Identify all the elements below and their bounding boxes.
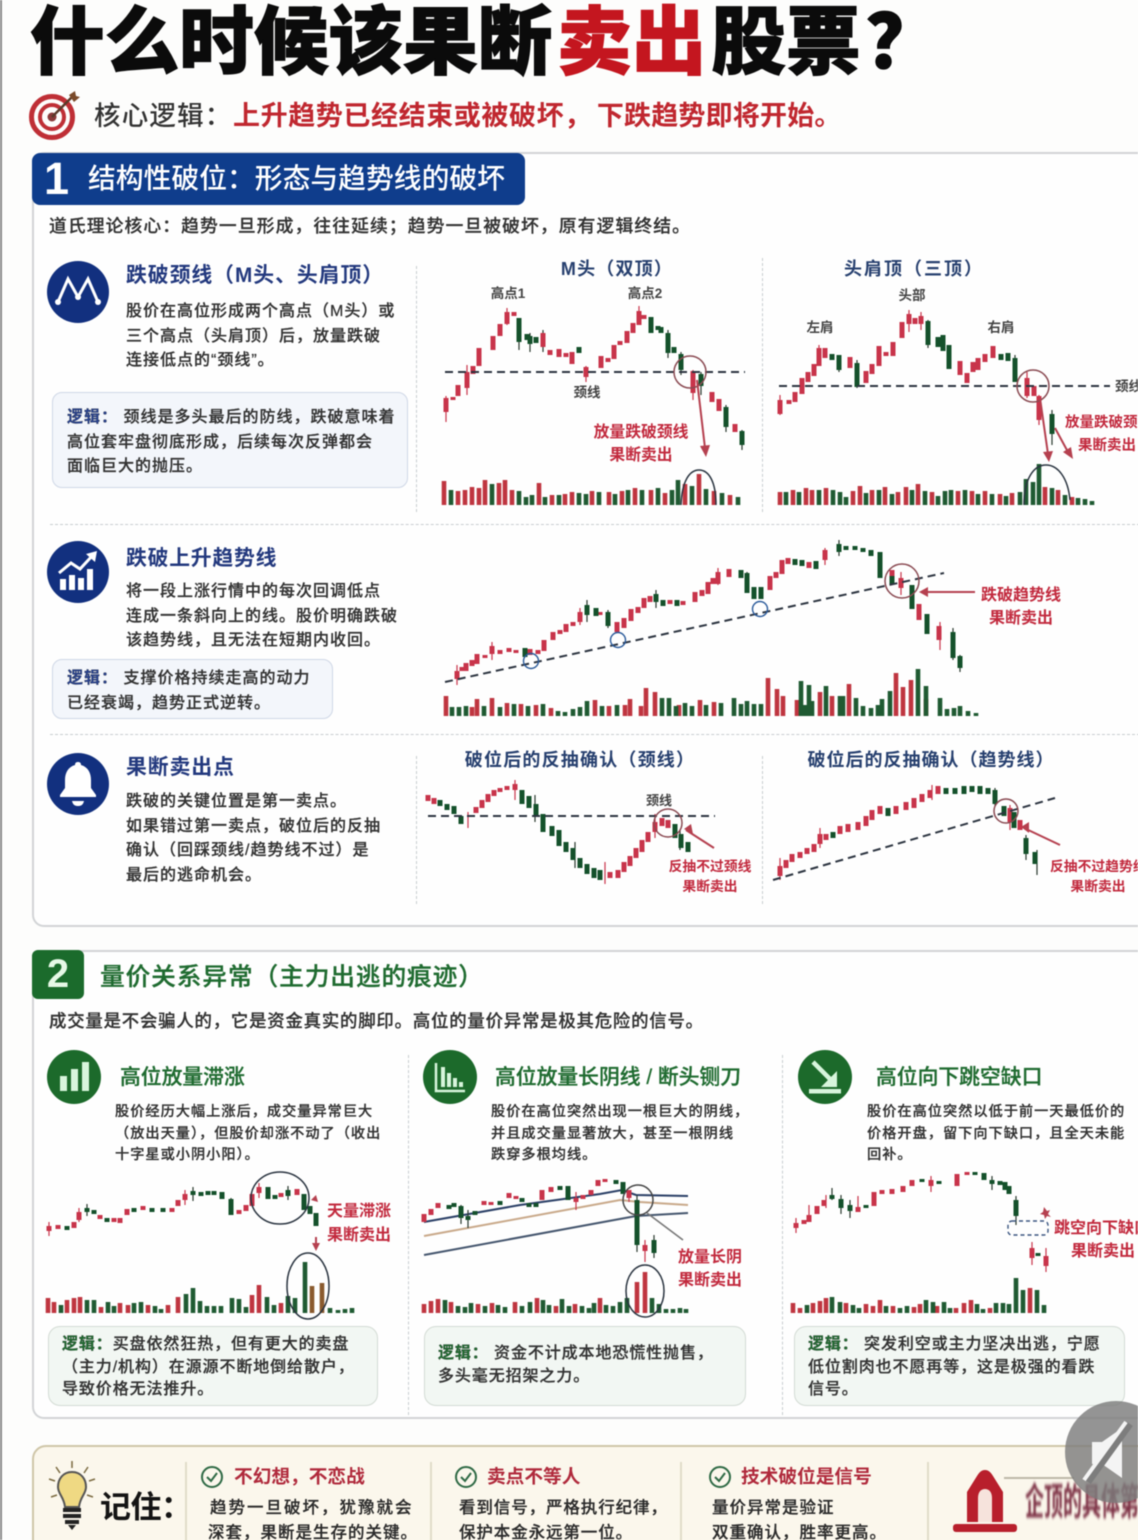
icon: check [200,1465,224,1489]
neckline logic box: 高位套牢盘彻底形成，后续每次反弹都会 [67,434,373,450]
blurred slogan: 企顶的具体第 [1025,1483,1138,1525]
description: （放出天量），但股价却涨不动了（收出 [115,1126,381,1142]
chart: neckline retest: 反抽不过颈线 [669,858,752,874]
chart: M top candlesticks [440,285,746,506]
tip 3 [708,1465,887,1540]
chart: head and shoulders candlesticks: 右肩 [988,319,1014,335]
tip text: 量价异常是验证 [712,1499,834,1517]
logic box: 低位割肉也不愿再等，这是极强的看跌 [808,1358,1095,1376]
neckline logic box [52,392,408,488]
tip text [458,1498,668,1540]
description: 回补。 [867,1147,913,1163]
section title: 结构性破位：形态与趋势线的破坏 [88,163,505,194]
overlay: grey mute button [1064,1400,1138,1504]
heading: 高位放量长阴线 / 断头铡刀 [495,1066,741,1089]
icon: red peak arrow [952,1469,1018,1533]
section 2 number badge [32,950,84,999]
column: downward gap [794,1049,1126,1406]
sell point description: 确认（回踩颈线/趋势线不过）是 [126,842,369,859]
divider [185,1462,186,1540]
sell point description: 跌破的关键位置是第一卖点。 [126,793,347,810]
chart title: M top: M头（双顶） [561,259,673,279]
sell point description [126,791,381,884]
chart: head and shoulders candlesticks: 头部 [898,287,926,303]
chart: long bearish candle with moving averages: 果断卖出 [678,1270,742,1289]
chart: M top candlesticks: 高点2 [628,285,662,301]
panel: remember footer [32,1445,1138,1540]
divider [50,524,1138,525]
logic box [424,1326,746,1406]
chart: uptrend break [442,539,1062,717]
heading: 高位放量滞涨 [120,1066,245,1089]
divider [430,1462,432,1540]
thin line above slogan [1004,1477,1074,1478]
description [114,1102,381,1163]
section 2 number badge: 2 [47,952,69,996]
neckline heading: 跌破颈线（M头、头肩顶） [126,264,384,287]
trendline description: 该趋势线，且无法在短期内收回。 [126,632,381,649]
description: 跌穿多根均线。 [491,1147,597,1163]
chart: long bearish candle with moving averages [420,1178,742,1318]
neckline description: 三个高点（头肩顶）后，放量跌破 [126,328,381,344]
description: 并且成交量显著放大，甚至一根阴线 [491,1126,734,1142]
chart: M top candlesticks: 颈线 [574,384,601,400]
neckline logic box: 面临巨大的抛压。 [67,458,203,475]
chart: head and shoulders candlesticks: 果断卖出 [1078,436,1136,454]
description [866,1102,1125,1163]
section 2 intro: 成交量是不会骗人的，它是资金真实的脚印。高位的量价异常是极其危险的信号。 [49,1011,704,1031]
neckline description: 股价在高位形成两个高点（M头）或 [126,303,395,320]
trendline description: 连成一条斜向上的线。股价明确跌破 [126,608,398,624]
tip text: 趋势一旦破坏，犹豫就会 [210,1499,414,1517]
neckline description [126,301,395,369]
divider [927,1462,928,1540]
chart: neckline retest: 果断卖出 [682,878,738,894]
chart: M top candlesticks: 高点1 [491,285,526,301]
trendline heading: 跌破上升趋势线 [126,547,277,570]
logic box: 逻辑： 资金不计成本地恐慌性抛售， [438,1345,714,1362]
chart: head and shoulders candlesticks: 左肩 [806,319,834,335]
chart title: trendline retest: 破位后的反抽确认（趋势线） [808,750,1054,770]
core logic subtitle: 核心逻辑： [94,101,232,131]
section 2 title: 量价关系异常（主力出逃的痕迹） [100,964,484,991]
chart title: head and shoulders: 头肩顶（三顶） [844,259,984,279]
neckline logic box: 逻辑： 颈线是多头最后的防线，跌破意味着 [67,409,395,426]
divider [680,1462,682,1540]
chart: uptrend break: 跌破趋势线 [981,585,1061,604]
column: long bearish candle [422,1049,749,1406]
divider [50,734,1138,735]
chart: high-volume stall [44,1170,392,1320]
chart: head and shoulders candlesticks [776,287,1138,506]
column: high-volume stall [46,1049,381,1406]
core logic statement: 上升趋势已经结束或被破坏，下跌趋势即将开始。 [233,101,842,131]
panel: section 1 structural break [32,152,1138,927]
chart: trendline retest [772,784,1138,894]
tip title: 不幻想，不恋战 [234,1466,365,1487]
icon: target [28,90,80,141]
description: 股价在高位突然以低于前一天最低价的 [867,1104,1125,1120]
trendline logic box [52,659,333,719]
icon: check [708,1465,732,1489]
trendline logic box: 逻辑： 支撑价格持续走高的动力 [67,670,310,687]
tip text: 看到信号，严格执行纪律， [459,1499,668,1517]
logic box [794,1326,1125,1406]
description [490,1102,749,1163]
chart: downward gap: 果断卖出 [1071,1241,1135,1260]
chart: uptrend break: 果断卖出 [989,608,1053,627]
heading: 高位向下跳空缺口 [876,1066,1042,1089]
title: 什么时候该果断卖出股票？ [30,0,940,84]
tip title: 技术破位是信号 [741,1466,872,1487]
remember label: 记住： [100,1490,192,1525]
chart: trendline retest: 果断卖出 [1070,878,1126,894]
chart: M top candlesticks: 放量跌破颈线 [594,422,689,441]
chart: downward gap [790,1171,1138,1314]
tip title: 卖点不等人 [487,1466,580,1487]
tip 2 [454,1465,668,1540]
trendline description [126,581,398,649]
logic box [48,1326,378,1406]
tip text [712,1498,887,1540]
neckline description: 连接低点的“颈线”。 [126,352,275,369]
tip 1 [200,1465,418,1540]
icon: rising bars [46,1049,102,1105]
sell point description: 最后的逃命机会。 [126,866,262,884]
description: 十字星或小阴小阳）。 [115,1147,260,1163]
chart title: neckline retest: 破位后的反抽确认（颈线） [465,750,695,770]
section 1 header tab [32,153,525,205]
section number: 1 [44,153,69,204]
chart: high-volume stall: 天量滞涨 [327,1202,391,1220]
chart: long bearish candle with moving averages: 放量长阴 [678,1248,742,1266]
icon: M pattern [46,260,110,324]
chart: neckline retest: 颈线 [646,793,672,808]
chart: neckline retest [424,779,752,894]
divider [762,258,763,512]
intro text: 道氏理论核心：趋势一旦形成，往往延续；趋势一旦被破坏，原有逻辑终结。 [49,216,691,236]
logic box: 逻辑：买盘依然狂热，但有更大的卖盘 [62,1336,349,1353]
sell point heading: 果断卖出点 [126,756,235,779]
icon: light bulb [48,1460,96,1530]
icon: uptrend [46,540,110,604]
chart: M top candlesticks: 果断卖出 [609,445,673,464]
description: 股价经历大幅上涨后，成交量异常巨大 [115,1104,373,1120]
icon: check [454,1465,478,1489]
sell point description: 如果错过第一卖点，破位后的反抽 [126,818,381,834]
panel: section 2 volume-price anomaly [32,950,1138,1419]
logic box: 逻辑： 突发利空或主力坚决出逃，宁愿 [808,1336,1101,1353]
page left edge [0,0,2,1540]
logic box: 信号。 [808,1381,859,1398]
divider [408,1055,409,1415]
divider [762,756,763,904]
chart: high-volume stall: 果断卖出 [327,1225,391,1244]
logic box: （主力/机构）在源源不断地倒给散户， [62,1358,355,1376]
icon: bell [46,752,110,816]
trendline logic box: 已经衰竭，趋势正式逆转。 [67,694,271,712]
trendline description: 将一段上涨行情中的每次回调低点 [126,583,381,600]
divider [416,756,417,904]
divider [416,266,417,512]
divider [782,1055,783,1415]
icon: falling chart [422,1049,478,1105]
tip text [208,1498,418,1540]
logic box: 多头毫无招架之力。 [438,1368,590,1384]
logic box: 导致价格无法推升。 [62,1381,214,1398]
icon: down arrow on base [797,1049,853,1105]
description: 价格开盘，留下向下缺口，且全天未能 [867,1126,1125,1142]
description: 股价在高位突然出现一根巨大的阴线， [491,1104,749,1120]
